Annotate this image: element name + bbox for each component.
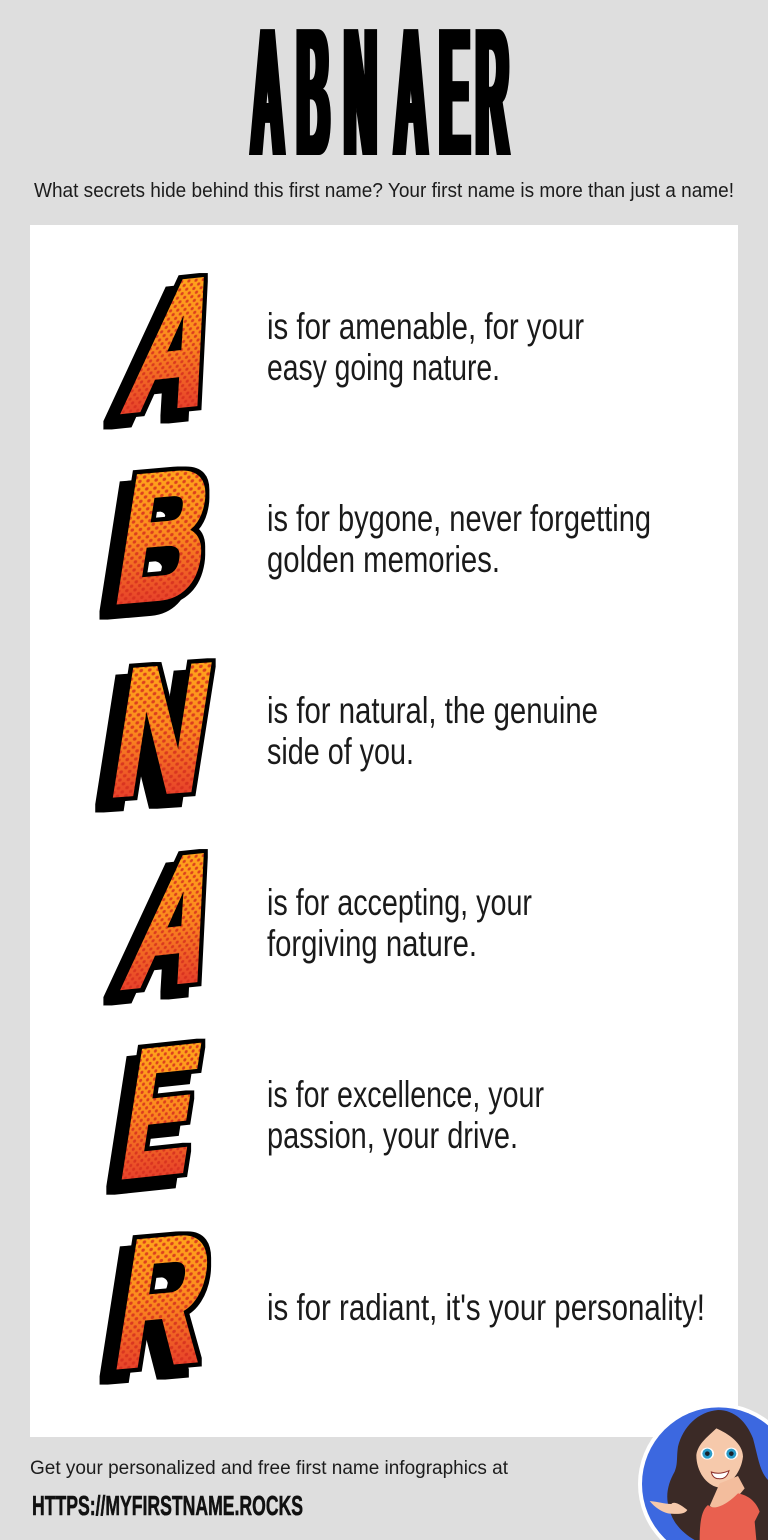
text: A meaning: easy going nature. [267, 347, 500, 388]
icon: comic letter B: B [105, 431, 224, 640]
text: E meaning: passion, your drive. [267, 1115, 518, 1156]
icon: comic letter R: R [92, 1207, 210, 1417]
text: B meaning [267, 498, 651, 580]
text: N meaning [267, 690, 598, 772]
footer text: Get your personalized and free first name infographics at [30, 1457, 509, 1479]
panel: name letters [30, 225, 738, 1437]
text: A meaning: is for amenable, for your [267, 306, 584, 347]
icon: avatar [638, 1403, 768, 1540]
row: letter R [92, 1196, 705, 1417]
icon: comic letter B: B [105, 431, 224, 640]
text: N meaning: side of you. [267, 731, 414, 772]
icon: comic letter N: N [87, 638, 210, 845]
row: letter E [99, 1006, 544, 1227]
text: A meaning: forgiving nature. [267, 923, 477, 964]
text: A meaning [267, 882, 532, 964]
icon: comic letter E: E [99, 1017, 200, 1227]
row: letter A [99, 240, 584, 461]
icon: comic letter B: B [92, 443, 211, 652]
row: letter N [87, 627, 598, 845]
icon: comic letter N: N [101, 627, 224, 834]
icon: comic letter A: A [99, 252, 227, 461]
text: N meaning: is for natural, the genuine [267, 690, 598, 731]
footer url: HTTPS://MYFIRSTNAME.ROCKS [32, 1490, 303, 1521]
icon: comic letter R: R [105, 1196, 223, 1406]
icon: comic letter E: E [111, 1006, 211, 1216]
icon: comic letter E: E [111, 1006, 211, 1216]
text: E meaning [267, 1074, 544, 1156]
icon: comic letter A: A [99, 828, 227, 1037]
icon: comic letter R: R [105, 1196, 223, 1406]
text: A meaning: is for accepting, your [267, 882, 532, 923]
text: E meaning: is for excellence, your [267, 1074, 544, 1115]
text: B meaning: is for bygone, never forgetting [267, 498, 651, 539]
icon: comic letter A: A [112, 240, 240, 449]
icon: comic letter A: A [112, 816, 240, 1025]
row: letter A second [99, 816, 532, 1037]
text: A meaning [267, 306, 584, 388]
row: letter B [92, 431, 651, 652]
icon: comic letter A: A [112, 240, 240, 449]
text: B meaning: golden memories. [267, 539, 500, 580]
subtitle: What secrets hide behind this first name? Your first name is more than just a name! [34, 180, 734, 202]
icon: comic letter N: N [101, 627, 224, 834]
icon: comic letter A: A [112, 816, 240, 1025]
